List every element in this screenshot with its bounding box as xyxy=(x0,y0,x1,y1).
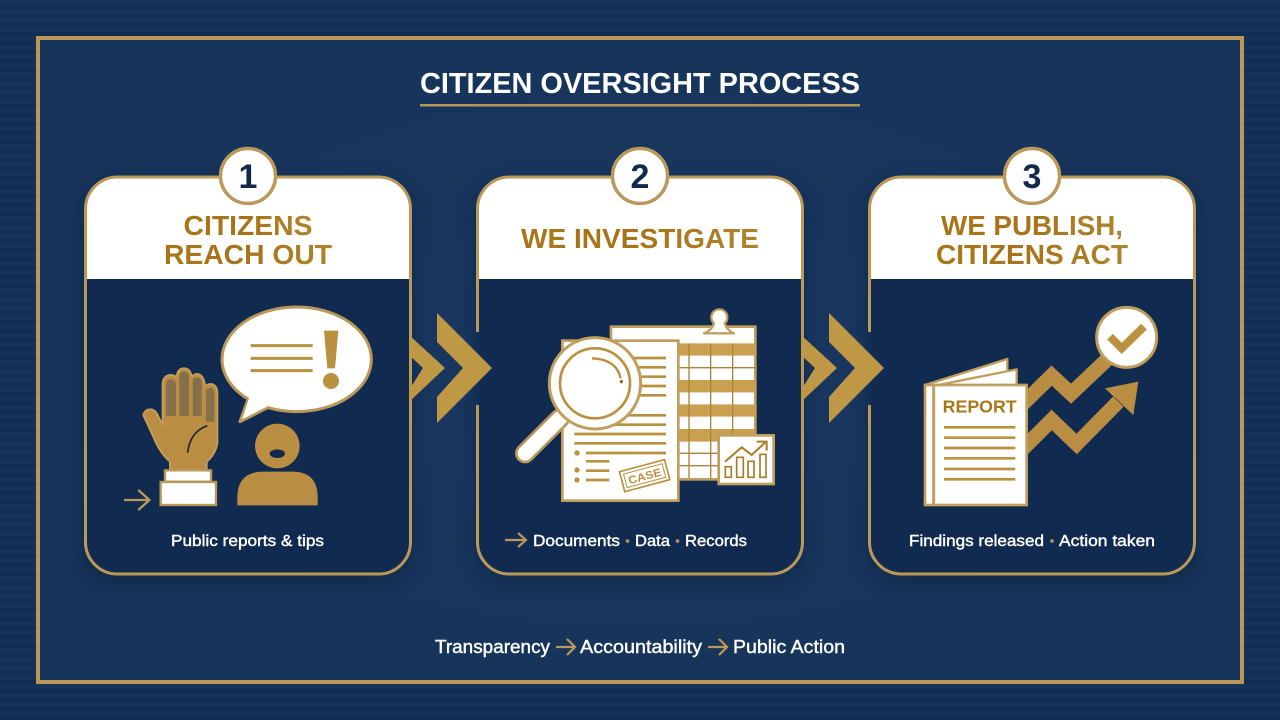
caption: documents, data, records: Data xyxy=(635,533,670,550)
panel: step 3 we publish, citizens act xyxy=(868,148,1195,580)
footer: transparency, accountability, public action: Transparency xyxy=(435,637,550,657)
panel: step 1 citizens reach out xyxy=(85,148,411,580)
caption: findings released, action taken xyxy=(909,533,1155,550)
footer: transparency, accountability, public action: Public Action xyxy=(733,637,845,657)
icon: speech bubble xyxy=(222,307,371,422)
footer: transparency, accountability, public action xyxy=(435,637,845,657)
caption: public reports and tips: Public reports & tips xyxy=(171,533,324,550)
badge 2 xyxy=(612,148,668,204)
icon: documents and magnifier xyxy=(525,309,774,501)
icon: report with rising arrows xyxy=(925,307,1157,505)
heading: we publish, citizens act: WE PUBLISH, xyxy=(941,210,1123,241)
badge 1: 1 xyxy=(239,158,257,196)
badge 3: 3 xyxy=(1023,158,1041,196)
icon: magnifying glass xyxy=(525,338,641,453)
caption: documents, data, records: Documents xyxy=(533,533,620,550)
icon: hand xyxy=(143,368,217,505)
footer: transparency, accountability, public action: Accountability xyxy=(580,637,702,657)
icon: person xyxy=(237,424,318,505)
icon: raised hand, speech bubble and person xyxy=(124,307,371,510)
panel: step 2 we investigate xyxy=(476,148,803,580)
caption: documents, data, records: Records xyxy=(685,533,747,550)
badge 1 xyxy=(220,148,276,204)
badge 2: 2 xyxy=(631,158,649,196)
heading: citizens reach out xyxy=(164,210,332,270)
icon: case document xyxy=(562,341,678,501)
icon: check circle xyxy=(1097,307,1157,367)
icon: upper trend line xyxy=(1020,358,1108,407)
icon: spreadsheet on clipboard xyxy=(611,309,755,479)
caption: findings released, action taken: Findings released xyxy=(909,533,1044,550)
heading: we publish, citizens act xyxy=(936,210,1128,270)
caption: documents, data, records xyxy=(505,533,747,550)
caption: findings released, action taken: Action taken xyxy=(1059,533,1155,550)
arrow: chevrons between step 2 and 3 xyxy=(801,313,884,423)
icon: report booklet: REPORT xyxy=(943,397,1017,417)
heading: we investigate: WE INVESTIGATE xyxy=(521,223,759,254)
title: CITIZEN OVERSIGHT PROCESS xyxy=(420,68,860,100)
icon: case document: CASE xyxy=(627,467,663,487)
icon: arrow xyxy=(124,490,149,510)
icon: lower trend arrow xyxy=(1020,382,1138,452)
heading: citizens reach out: CITIZENS xyxy=(184,210,312,241)
heading: citizens reach out: REACH OUT xyxy=(164,239,332,270)
icon: small chart xyxy=(719,435,774,484)
icon: report booklet xyxy=(925,359,1027,505)
arrow: chevrons between step 1 and 2 xyxy=(409,313,492,423)
badge 3 xyxy=(1004,148,1060,204)
heading: we publish, citizens act: CITIZENS ACT xyxy=(936,239,1128,270)
